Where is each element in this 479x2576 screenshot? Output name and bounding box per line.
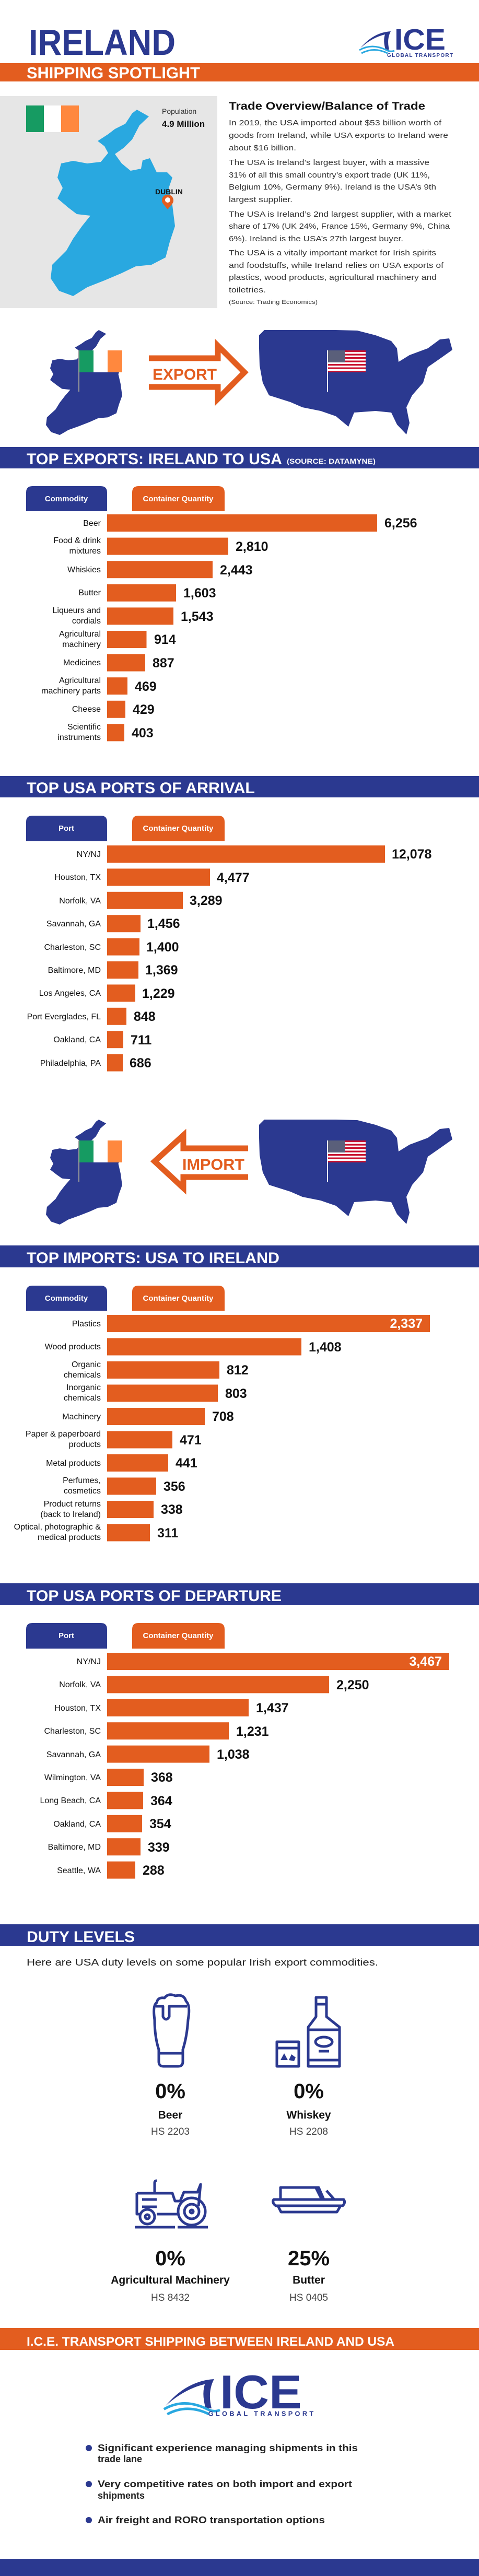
bar chart: top imports: medical products bbox=[38, 1533, 101, 1542]
text block: trade overview: The USA is Ireland’s largest buyer, with a massive bbox=[229, 158, 429, 167]
bar chart: top exports: Liqueurs and bbox=[52, 606, 101, 615]
bar chart: top exports: instruments bbox=[57, 733, 101, 742]
text block: trade overview: toiletries. bbox=[229, 286, 266, 295]
bar chart: ports of arrival: 1,369 bbox=[145, 963, 178, 978]
bar chart: top exports: 1,603 bbox=[183, 586, 216, 601]
heading: top exports bbox=[0, 447, 479, 468]
bar chart: ports of departure: 368 bbox=[151, 1770, 173, 1785]
bar chart: ports of arrival: 711 bbox=[131, 1033, 151, 1048]
map of Ireland bbox=[51, 110, 175, 296]
tabs: Commodity bbox=[45, 1294, 88, 1303]
heading: top exports: (SOURCE: DATAMYNE) bbox=[287, 457, 376, 465]
text block: trade overview: 6%). Ireland is the USA’s 27th largest buyer. bbox=[229, 234, 403, 243]
heading: ports of arrival: TOP USA PORTS OF ARRIVAL bbox=[27, 780, 255, 797]
icon: butter dish bbox=[273, 2187, 345, 2212]
bar chart: ports of arrival: Port Everglades, FL bbox=[27, 1013, 101, 1021]
bar chart: top exports bbox=[26, 486, 417, 742]
bar chart: top imports: Paper & paperboard bbox=[26, 1430, 101, 1439]
tabs bbox=[26, 486, 225, 511]
banner: shipping spotlight: SHIPPING SPOTLIGHT bbox=[27, 64, 200, 82]
icon: Irish flag on pole bbox=[78, 350, 122, 392]
tabs bbox=[26, 1286, 225, 1311]
bar chart: ports of arrival: 1,456 bbox=[147, 916, 180, 931]
logo: ICE Global Transport: GLOBAL TRANSPORT bbox=[387, 53, 453, 58]
icon: Irish flag bbox=[26, 105, 79, 132]
map: Ireland navy bbox=[46, 330, 122, 435]
bar chart: top imports: Perfumes, bbox=[63, 1476, 101, 1485]
bar chart: ports of arrival: 12,078 bbox=[392, 847, 432, 862]
arrow: export bbox=[149, 346, 244, 399]
tabs: Port bbox=[59, 824, 74, 833]
bar chart: top exports: Cheese bbox=[72, 705, 101, 714]
bar chart: top imports: 1,408 bbox=[309, 1340, 342, 1355]
bar chart: ports of arrival: 686 bbox=[130, 1056, 151, 1071]
duty item: beer: 0% bbox=[155, 2080, 185, 2103]
bullet list: Significant experience managing shipments in this bbox=[98, 2443, 358, 2453]
logo: ICE Global Transport large bbox=[164, 2366, 313, 2419]
bar chart: top imports: (back to Ireland) bbox=[40, 1510, 101, 1519]
banner: ICE transport shipping bbox=[0, 2328, 479, 2350]
bar chart: top exports: cordials bbox=[72, 617, 101, 626]
text block: trade overview: plastics, wood products, agricultural machinery and bbox=[229, 273, 437, 282]
bar chart: top exports: Agricultural bbox=[59, 676, 101, 685]
duty item: butter: Butter bbox=[293, 2274, 325, 2286]
bar chart: ports of departure: Wilmington, VA bbox=[44, 1773, 101, 1782]
heading: top imports bbox=[0, 1245, 479, 1267]
bar chart: ports of arrival: 4,477 bbox=[217, 871, 250, 885]
text block: trade overview: Trade Overview/Balance of Trade bbox=[229, 100, 425, 112]
tabs: Commodity bbox=[45, 495, 88, 503]
bar chart: ports of arrival: Charleston, SC bbox=[44, 943, 101, 952]
Dublin marker: DUBLIN bbox=[155, 187, 183, 196]
bar chart: top imports: chemicals bbox=[64, 1371, 101, 1380]
bar chart: top imports: 441 bbox=[176, 1456, 197, 1471]
tabs: Container Quantity bbox=[143, 1294, 214, 1303]
bar chart: top exports: Food & drink bbox=[53, 536, 101, 545]
bar chart: ports of departure: Seattle, WA bbox=[57, 1866, 101, 1875]
duty item: agricultural machinery: HS 8432 bbox=[151, 2292, 190, 2303]
bar chart: top imports: cosmetics bbox=[64, 1487, 101, 1496]
text block: trade overview: goods from Ireland, while USA exports to Ireland were bbox=[229, 131, 448, 140]
icon: beer glass bbox=[154, 1995, 189, 2066]
bar chart: top imports: Optical, photographic & bbox=[14, 1523, 101, 1532]
text: duty intro: Here are USA duty levels on some popular Irish export commodities. bbox=[27, 1957, 378, 1968]
text block: trade overview: The USA is Ireland’s 2nd largest supplier, with a market bbox=[229, 210, 452, 219]
logo: ICE Global Transport large: GLOBAL TRANSPORT bbox=[208, 2409, 313, 2417]
bar chart: top imports: Machinery bbox=[62, 1413, 101, 1421]
bar chart: top imports: 803 bbox=[225, 1386, 247, 1401]
arrow: import: IMPORT bbox=[182, 1156, 244, 1173]
banner: shipping spotlight bbox=[0, 63, 479, 82]
population: 4.9 Million bbox=[162, 119, 205, 129]
bar chart: ports of departure: Charleston, SC bbox=[44, 1727, 101, 1736]
text block: trade overview: In 2019, the USA imported about $53 billion worth of bbox=[229, 119, 442, 127]
bar chart: ports of departure: 2,250 bbox=[336, 1678, 369, 1692]
text block: trade overview: Belgium 10%, Germany 9%). Ireland is the USA’s 9th bbox=[229, 183, 436, 192]
map: Ireland navy bbox=[46, 1120, 122, 1225]
duty item: agricultural machinery: 0% bbox=[155, 2247, 185, 2270]
tabs: Container Quantity bbox=[143, 1631, 214, 1640]
bar chart: ports of departure: 339 bbox=[148, 1840, 170, 1855]
banner: ICE transport shipping: I.C.E. TRANSPORT SHIPPING BETWEEN IRELAND AND USA bbox=[27, 2335, 394, 2349]
bar chart: top exports: Scientific bbox=[67, 723, 101, 732]
bar chart: ports of arrival: Oakland, CA bbox=[53, 1036, 101, 1044]
duty item: whiskey: 0% bbox=[294, 2080, 324, 2103]
title: IRELAND bbox=[29, 22, 176, 63]
bar chart: top imports: Metal products bbox=[46, 1459, 101, 1468]
duty item: whiskey: HS 2208 bbox=[289, 2126, 328, 2137]
text block: trade overview: (Source: Trading Economics) bbox=[229, 299, 318, 305]
bar chart: top exports: 887 bbox=[153, 656, 174, 671]
population bbox=[162, 107, 205, 129]
tabs: Port bbox=[59, 1631, 74, 1640]
bullet list: Very competitive rates on both import and export bbox=[98, 2479, 352, 2489]
arrow: import bbox=[155, 1135, 248, 1188]
bar chart: top exports: 2,443 bbox=[220, 563, 253, 578]
footer bar bbox=[0, 2559, 479, 2576]
heading: duty levels: DUTY LEVELS bbox=[27, 1928, 135, 1946]
bar chart: ports of arrival: Philadelphia, PA bbox=[40, 1059, 101, 1068]
bar chart: top exports: 469 bbox=[135, 679, 157, 694]
bar chart: ports of arrival: Los Angeles, CA bbox=[39, 989, 101, 998]
text block: trade overview: 31% of all this small country’s export trade (UK 11%, bbox=[229, 171, 430, 180]
bar chart: ports of departure: Savannah, GA bbox=[46, 1750, 101, 1759]
bar chart: top exports: 1,543 bbox=[181, 609, 214, 624]
bar chart: top exports: machinery parts bbox=[41, 687, 101, 696]
bar chart: ports of departure: 1,231 bbox=[236, 1724, 269, 1739]
bar chart: top exports: Medicines bbox=[63, 658, 101, 667]
bar chart: top exports: Butter bbox=[78, 589, 101, 597]
text block: trade overview bbox=[229, 100, 452, 305]
bar chart: top imports: 311 bbox=[157, 1526, 178, 1540]
duty item: beer: HS 2203 bbox=[151, 2126, 190, 2137]
bar chart: ports of arrival: NY/NJ bbox=[77, 850, 101, 859]
bar chart: ports of departure: NY/NJ bbox=[77, 1657, 101, 1666]
text block: trade overview: The USA is a vitally important market for Irish spirits bbox=[229, 249, 436, 257]
text block: trade overview: share of 17% (UK 24%, France 15%, Germany 9%, China bbox=[229, 222, 450, 231]
icon: US flag bbox=[327, 350, 366, 392]
bar chart: top exports: Whiskies bbox=[67, 566, 101, 574]
icon: Irish flag on pole bbox=[78, 1140, 122, 1182]
bar chart: top exports: mixtures bbox=[69, 547, 101, 556]
heading: ports of arrival bbox=[0, 776, 479, 797]
bar chart: top imports: Plastics bbox=[72, 1320, 101, 1328]
bar chart: top exports: Agricultural bbox=[59, 630, 101, 639]
bullet list: trade lane bbox=[98, 2454, 142, 2464]
duty item: agricultural machinery: Agricultural Machinery bbox=[111, 2274, 230, 2286]
bar chart: top exports: Beer bbox=[83, 519, 101, 528]
import graphic bbox=[46, 1120, 452, 1225]
bar chart: top imports: 708 bbox=[212, 1409, 234, 1424]
bar chart: top imports: Wood products bbox=[45, 1343, 101, 1351]
heading: duty levels bbox=[0, 1924, 479, 1946]
bar chart: top imports: 338 bbox=[161, 1502, 183, 1517]
bar chart: ports of arrival: 1,400 bbox=[146, 940, 179, 955]
duty item: butter: HS 0405 bbox=[289, 2292, 328, 2303]
icon: tractor bbox=[135, 2181, 208, 2227]
bar chart: ports of departure: 1,038 bbox=[217, 1747, 250, 1762]
bar chart: ports of arrival: 848 bbox=[134, 1009, 156, 1024]
bar chart: ports of departure bbox=[26, 1623, 449, 1879]
arrow: export: EXPORT bbox=[153, 366, 217, 383]
logo: ICE Global Transport: ICE bbox=[394, 23, 446, 56]
bar chart: ports of departure: Baltimore, MD bbox=[48, 1843, 101, 1852]
bar chart: ports of departure: 288 bbox=[143, 1863, 165, 1878]
bullet list: Air freight and RORO transportation options bbox=[98, 2515, 325, 2525]
logo: ICE Global Transport large: ICE bbox=[220, 2366, 302, 2419]
bullet list: shipments bbox=[98, 2490, 145, 2501]
bar chart: ports of departure: Houston, TX bbox=[54, 1704, 101, 1713]
bar chart: ports of departure: Long Beach, CA bbox=[40, 1796, 101, 1805]
bar chart: top imports: 2,337 bbox=[390, 1316, 423, 1331]
bar chart: ports of departure: 3,467 bbox=[409, 1654, 442, 1669]
bar chart: top imports: 356 bbox=[163, 1479, 185, 1494]
bar chart: ports of departure: 364 bbox=[150, 1794, 172, 1808]
bar chart: ports of arrival: Savannah, GA bbox=[46, 920, 101, 928]
text block: trade overview: about $16 billion. bbox=[229, 144, 296, 152]
duty item: butter bbox=[273, 2187, 345, 2303]
heading: ports of departure: TOP USA PORTS OF DEPARTURE bbox=[27, 1587, 282, 1605]
bar chart: top exports: machinery bbox=[62, 640, 101, 649]
duty item: butter: 25% bbox=[288, 2247, 330, 2270]
tabs bbox=[26, 1623, 225, 1649]
export graphic bbox=[46, 330, 452, 435]
heading: top exports: TOP EXPORTS: IRELAND TO USA bbox=[27, 451, 282, 468]
bar chart: ports of departure: Oakland, CA bbox=[53, 1820, 101, 1829]
duty item: beer: Beer bbox=[158, 2109, 182, 2121]
bar chart: top exports: 6,256 bbox=[384, 516, 417, 531]
bar chart: top exports: 2,810 bbox=[236, 539, 268, 554]
map: USA bbox=[259, 1120, 452, 1224]
population: Population bbox=[162, 107, 196, 115]
bar chart: top imports: chemicals bbox=[64, 1394, 101, 1403]
bar chart: ports of arrival: 1,229 bbox=[142, 986, 175, 1001]
map: USA bbox=[259, 330, 452, 434]
text block: trade overview: and foodstuffs, while Ireland relies on USA exports of bbox=[229, 261, 444, 270]
bar chart: top exports: 403 bbox=[132, 726, 154, 740]
bar chart: top imports: Product returns bbox=[44, 1500, 101, 1509]
bar chart: ports of arrival: Houston, TX bbox=[54, 873, 101, 882]
Dublin marker bbox=[155, 187, 183, 209]
bar chart: ports of arrival: Norfolk, VA bbox=[59, 897, 101, 905]
duty item: whiskey: Whiskey bbox=[286, 2109, 331, 2121]
tabs: Container Quantity bbox=[143, 495, 214, 503]
heading: ports of departure bbox=[0, 1583, 479, 1605]
bar chart: ports of departure: Norfolk, VA bbox=[59, 1680, 101, 1689]
bar chart: top imports: 471 bbox=[180, 1433, 202, 1448]
heading: top imports: TOP IMPORTS: USA TO IRELAND bbox=[27, 1250, 279, 1267]
bullet list bbox=[86, 2443, 358, 2525]
tabs bbox=[26, 816, 225, 841]
bar chart: top imports: Organic bbox=[72, 1360, 101, 1369]
bar chart: top exports: 914 bbox=[154, 632, 176, 647]
bar chart: ports of arrival: 3,289 bbox=[190, 893, 223, 908]
bar chart: ports of arrival bbox=[26, 816, 432, 1072]
bar chart: top exports: 429 bbox=[133, 702, 155, 717]
bar chart: top imports: Inorganic bbox=[66, 1383, 101, 1392]
duty item: whiskey bbox=[277, 1997, 340, 2137]
bar chart: top imports bbox=[14, 1286, 430, 1542]
duty item: beer bbox=[151, 1995, 190, 2137]
bar chart: ports of arrival: Baltimore, MD bbox=[48, 966, 101, 975]
text block: trade overview: largest supplier. bbox=[229, 195, 293, 204]
bar chart: top imports: products bbox=[69, 1440, 101, 1449]
panel: Ireland map bbox=[0, 96, 217, 308]
icon: US flag bbox=[327, 1140, 366, 1182]
tabs: Container Quantity bbox=[143, 824, 214, 833]
icon: whiskey bottle and glass bbox=[277, 1997, 340, 2066]
duty item: agricultural machinery bbox=[111, 2181, 230, 2303]
bar chart: top imports: 812 bbox=[227, 1363, 249, 1378]
logo: ICE Global Transport bbox=[359, 23, 453, 58]
bar chart: ports of departure: 1,437 bbox=[256, 1701, 289, 1715]
bar chart: ports of departure: 354 bbox=[149, 1817, 171, 1831]
